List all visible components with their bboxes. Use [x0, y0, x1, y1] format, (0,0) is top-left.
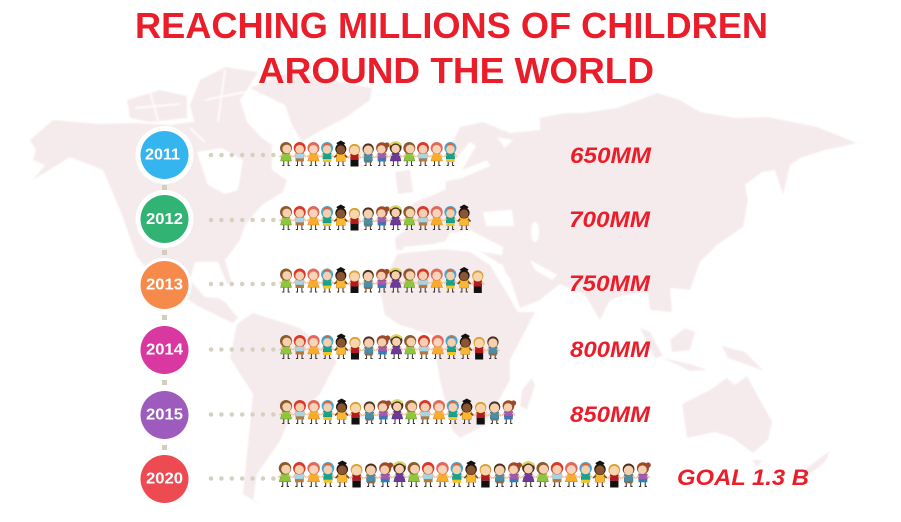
timeline connectors: [162, 185, 167, 450]
world map background: [30, 67, 857, 506]
year badge 2012: [136, 190, 194, 248]
year badge 2014: 2014: [146, 342, 183, 358]
value labels: 750MM: [569, 271, 651, 296]
children row 2014: 16 children: [279, 334, 499, 360]
year badge 2013: 2013: [146, 276, 183, 294]
title: [135, 5, 768, 91]
children row 2015: 17 children: [279, 398, 516, 424]
year badge 2013: [138, 258, 192, 312]
dotted leader lines: [211, 155, 278, 478]
title: AROUND THE WORLD: [258, 50, 654, 91]
value labels: 800MM: [570, 337, 651, 362]
value labels: 650MM: [570, 143, 652, 168]
year badge 2020: 2020: [146, 470, 183, 488]
title: REACHING MILLIONS OF CHILDREN: [135, 5, 768, 46]
year badge 2015: [140, 391, 188, 439]
children row 2012: 14 children: [280, 204, 471, 230]
children row 2011: 13 children: [280, 140, 457, 166]
children row 2013: 15 children: [280, 267, 484, 293]
value labels: 700MM: [569, 207, 651, 232]
children row 2020: 26 children: [278, 460, 651, 487]
year badge 2012: 2012: [146, 211, 183, 228]
value labels: [569, 143, 809, 490]
year badge 2015: 2015: [146, 406, 183, 424]
year badge 2020: [140, 455, 188, 503]
value labels: 850MM: [570, 402, 651, 427]
year badge 2014: [140, 326, 188, 374]
year badge 2011: [136, 126, 194, 184]
year badge 2011: 2011: [145, 146, 180, 164]
value labels: GOAL 1.3 B: [677, 465, 809, 490]
